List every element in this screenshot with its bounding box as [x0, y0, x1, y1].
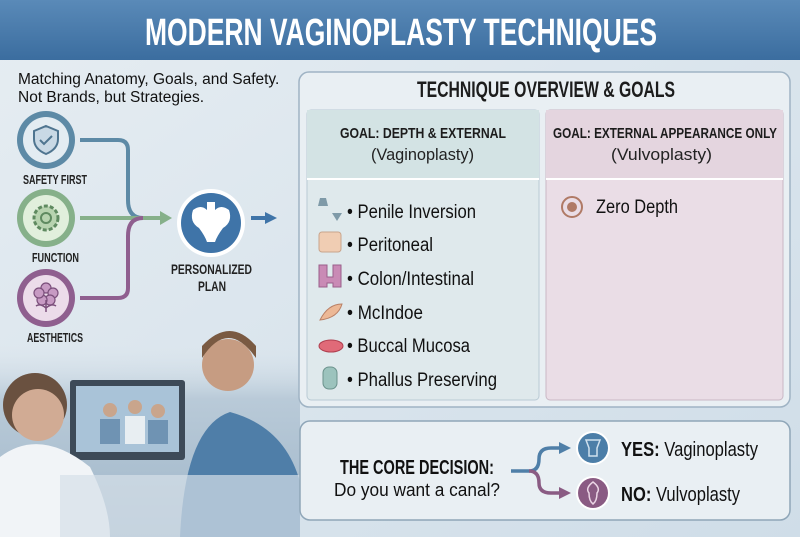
- column: vaginoplasty: • Penile Inversion: [347, 202, 476, 223]
- connectors: [80, 140, 277, 298]
- icon: no: [576, 476, 610, 510]
- column: vaginoplasty: [307, 110, 539, 400]
- column: vulvoplasty: Zero Depth: [596, 197, 678, 218]
- column: vaginoplasty: • Peritoneal: [347, 235, 433, 256]
- panel: technique overview: [299, 72, 790, 407]
- panel: core decision: NO: Vulvoplasty: [621, 484, 740, 506]
- technique icons: [318, 198, 343, 389]
- panel: core decision: THE CORE DECISION:: [340, 457, 494, 479]
- subtitle: Matching Anatomy, Goals, and Safety.: [18, 71, 279, 88]
- panel: core decision: YES: Vaginoplasty: [621, 439, 758, 461]
- heading: technique overview: TECHNIQUE OVERVIEW & GOALS: [417, 77, 675, 102]
- icon: yes: [576, 431, 610, 465]
- subtitle: Not Brands, but Strategies.: [18, 89, 204, 106]
- column: vulvoplasty: (Vulvoplasty): [611, 145, 712, 164]
- panel: core decision: [300, 421, 790, 520]
- column: vaginoplasty: • Buccal Mucosa: [347, 336, 470, 357]
- icon: personalized plan: PERSONALIZED: [171, 261, 252, 277]
- icon: safety first: [17, 111, 87, 187]
- arrows: decision branches: [511, 442, 571, 499]
- icon: safety first: SAFETY FIRST: [23, 172, 87, 187]
- icon: aesthetics: AESTHETICS: [27, 330, 83, 345]
- column: vaginoplasty: • Colon/Intestinal: [347, 269, 474, 290]
- icon: target: [562, 197, 582, 217]
- column: vaginoplasty: • Phallus Preserving: [347, 370, 497, 391]
- column: vaginoplasty: (Vaginoplasty): [371, 145, 474, 164]
- icon: aesthetics: [17, 269, 83, 345]
- column: vaginoplasty: • McIndoe: [347, 303, 423, 324]
- background photo: doctor consultation: [0, 331, 300, 537]
- title bar: [0, 0, 800, 60]
- icon: function: [17, 189, 79, 265]
- column: vaginoplasty: GOAL: DEPTH & EXTERNAL: [340, 125, 506, 142]
- panel: core decision: Do you want a canal?: [334, 480, 500, 500]
- icon: function: FUNCTION: [32, 250, 79, 265]
- icon: personalized plan: PLAN: [198, 278, 226, 294]
- column: vulvoplasty: [546, 110, 783, 400]
- icon: personalized plan: [171, 189, 252, 294]
